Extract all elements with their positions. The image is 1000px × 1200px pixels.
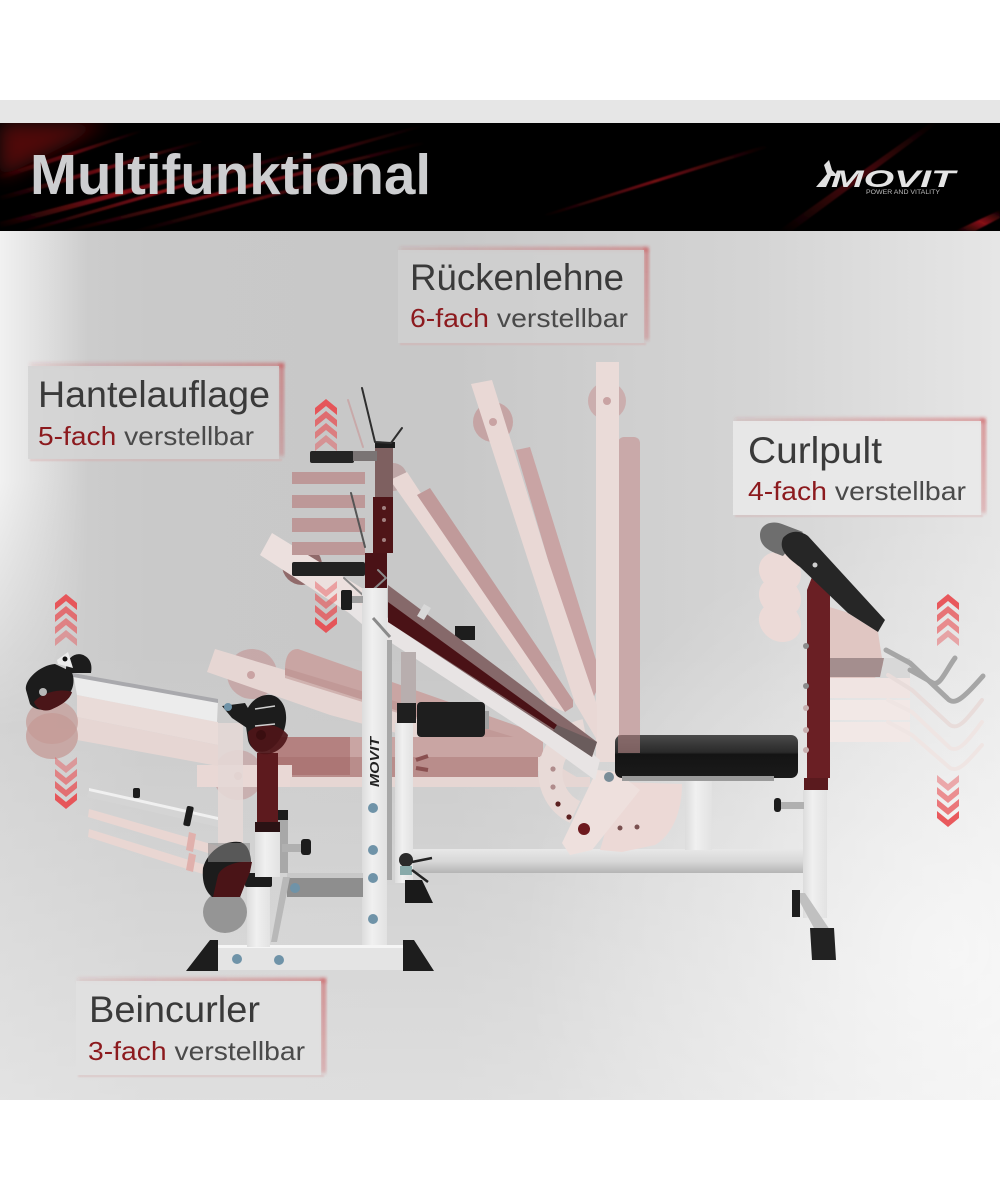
left roller ghosts: [26, 700, 78, 759]
bolts: [803, 643, 809, 649]
label: Hantelauflage: 5-fach verstellbar: [38, 421, 254, 451]
arrow: curl desk down: [937, 775, 959, 827]
arrow: leg curler down: [55, 757, 77, 809]
backrest pad: [388, 585, 597, 757]
label: Curlpult: Curlpult: [748, 430, 883, 471]
barbell rests: [292, 451, 377, 576]
label: Beincurler: 3-fach verstellbar: [88, 1036, 305, 1066]
rear foot: [792, 890, 836, 960]
rear bracket behind upright: [387, 626, 475, 880]
barbell sleeve: [87, 788, 218, 878]
title: Multifunktional: [30, 143, 431, 207]
label: Rückenlehne: Rückenlehne: [410, 257, 624, 298]
main beam: [413, 849, 805, 873]
leg roller: [395, 702, 489, 883]
label: Rückenlehne: 6-fach verstellbar: [410, 303, 628, 333]
label: Rückenlehne: [398, 247, 649, 345]
backrest frame: [348, 600, 600, 780]
curl bar: [886, 650, 983, 769]
arrow: barbell rest up: [315, 399, 337, 451]
ghost: vertical backrest: [588, 362, 640, 762]
base: [186, 940, 434, 971]
barbell rest post: [365, 442, 395, 589]
lower roller: [203, 842, 252, 933]
label: Hantelauflage: Hantelauflage: [38, 374, 270, 415]
rear upright: [803, 577, 830, 918]
ghost: raised headrest: [260, 533, 365, 622]
curl pad ghosts: [751, 544, 884, 678]
ghost: steep backrest: [471, 380, 597, 740]
leg curler arm: [73, 673, 218, 766]
logo: MOVIT: [816, 160, 959, 196]
label: Beincurler: Beincurler: [89, 989, 260, 1030]
ghost: mid backrest: [379, 463, 573, 712]
front upright: MOVIT: [367, 736, 382, 787]
angle adjustment plate: [550, 731, 682, 855]
barbell rests ghosts and pins: [292, 388, 402, 597]
header banner: [0, 123, 1000, 231]
label: Hantelauflage: [28, 363, 284, 461]
leg curler support: [218, 723, 288, 947]
logo: MOVIT: POWER AND VITALITY: [866, 190, 940, 196]
label: Curlpult: [733, 418, 986, 517]
ghost: vertical backrest overlay on seat: [618, 735, 640, 753]
right roller: [222, 695, 288, 754]
rack hooks: [344, 388, 402, 597]
decorative red streaks: [0, 123, 1000, 231]
curl rack ghost plates: [830, 658, 910, 742]
label: Beincurler: [76, 978, 326, 1077]
bench ghost positions: [197, 362, 640, 800]
left roller: [26, 652, 91, 711]
crossbar frame: [271, 873, 363, 942]
collar and wing nut: [399, 853, 433, 903]
arrow: barbell rest down: [315, 581, 337, 633]
label: Curlpult: 4-fach verstellbar: [748, 476, 966, 506]
ghost: flat backrest: [197, 737, 590, 800]
arrow: leg curler up: [55, 594, 77, 646]
seat knob: [774, 798, 804, 812]
seat post: [685, 780, 712, 850]
logo: MOVIT: MOVIT: [831, 166, 959, 193]
arrow: curl desk up: [937, 594, 959, 646]
seat pad: [615, 735, 798, 781]
ghost: low backrest: [207, 649, 590, 785]
knob: [282, 839, 311, 855]
curl pad: [760, 522, 885, 632]
front upright: [341, 588, 390, 945]
